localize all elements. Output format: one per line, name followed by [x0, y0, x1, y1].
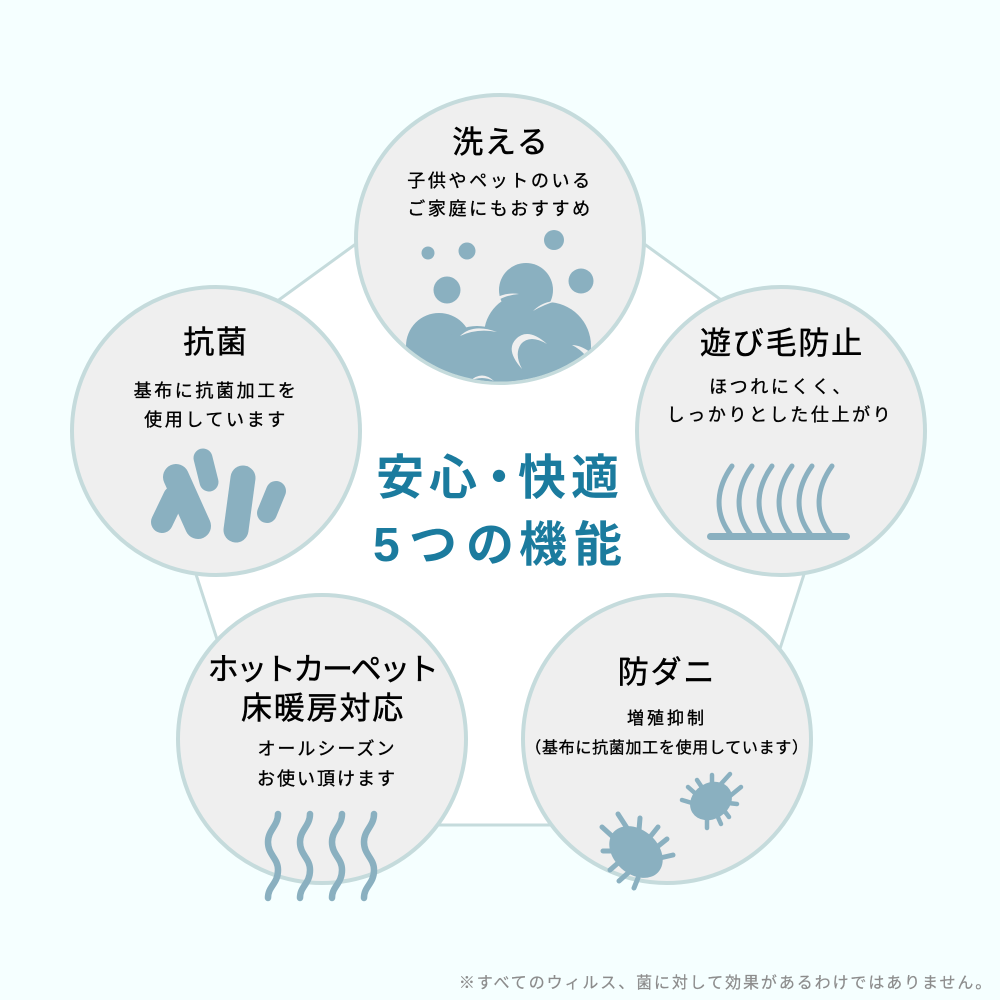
heading: floor heating compatible: ホットカーペット: [208, 652, 436, 687]
text: anti-pilling description: ほつれにくく、: [709, 377, 853, 397]
heading: floor heating compatible: [208, 652, 436, 726]
text: washable description: [407, 171, 593, 219]
text: antibacterial description: 使用しています: [144, 410, 288, 430]
footnote: ※すべてのウィルス、菌に対して効果があるわけではありません。: [459, 974, 993, 992]
text: antibacterial description: 基布に抗菌加工を: [134, 381, 298, 401]
text: floor heating description: お使い頂けます: [257, 769, 397, 789]
heading: anti-pilling: 遊び毛防止: [700, 326, 864, 361]
text: anti-mite description: 増殖抑制: [627, 709, 707, 728]
panel: washable: [354, 93, 646, 385]
icon: carpet fibres: [707, 466, 850, 540]
heading: antibacterial: 抗菌: [183, 325, 249, 360]
text: anti-pilling description: しっかりとした仕上がり: [667, 405, 893, 425]
icon: heat waves: [268, 814, 374, 898]
panel: anti-pilling: [637, 287, 925, 575]
text: floor heating description: [257, 739, 397, 789]
center title: [373, 452, 622, 572]
icon: bacteria: [162, 458, 276, 530]
text: anti-mite description: [525, 709, 809, 757]
pentagon connector: [140, 139, 860, 825]
text: anti-mite description: （基布に抗菌加工を使用しています）: [525, 739, 809, 757]
center title: 安心・快適: [376, 452, 619, 505]
heading: anti-mite: 防ダニ: [618, 655, 716, 690]
text: floor heating description: オールシーズン: [257, 739, 397, 759]
panel: floor heating compatible: [178, 595, 466, 898]
heading: washable: 洗える: [452, 125, 550, 160]
icon: mites: [599, 774, 741, 888]
heading: floor heating compatible: 床暖房対応: [241, 691, 405, 726]
text: anti-pilling description: [667, 377, 893, 425]
panel: antibacterial: [72, 287, 360, 575]
text: washable description: ご家庭にもおすすめ: [407, 199, 593, 219]
panel: anti-mite: [523, 595, 811, 888]
center title: 5つの機能: [373, 519, 622, 572]
text: washable description: 子供やペットのいる: [407, 171, 593, 191]
text: antibacterial description: [134, 381, 298, 430]
icon: soap bubbles: [406, 230, 594, 382]
